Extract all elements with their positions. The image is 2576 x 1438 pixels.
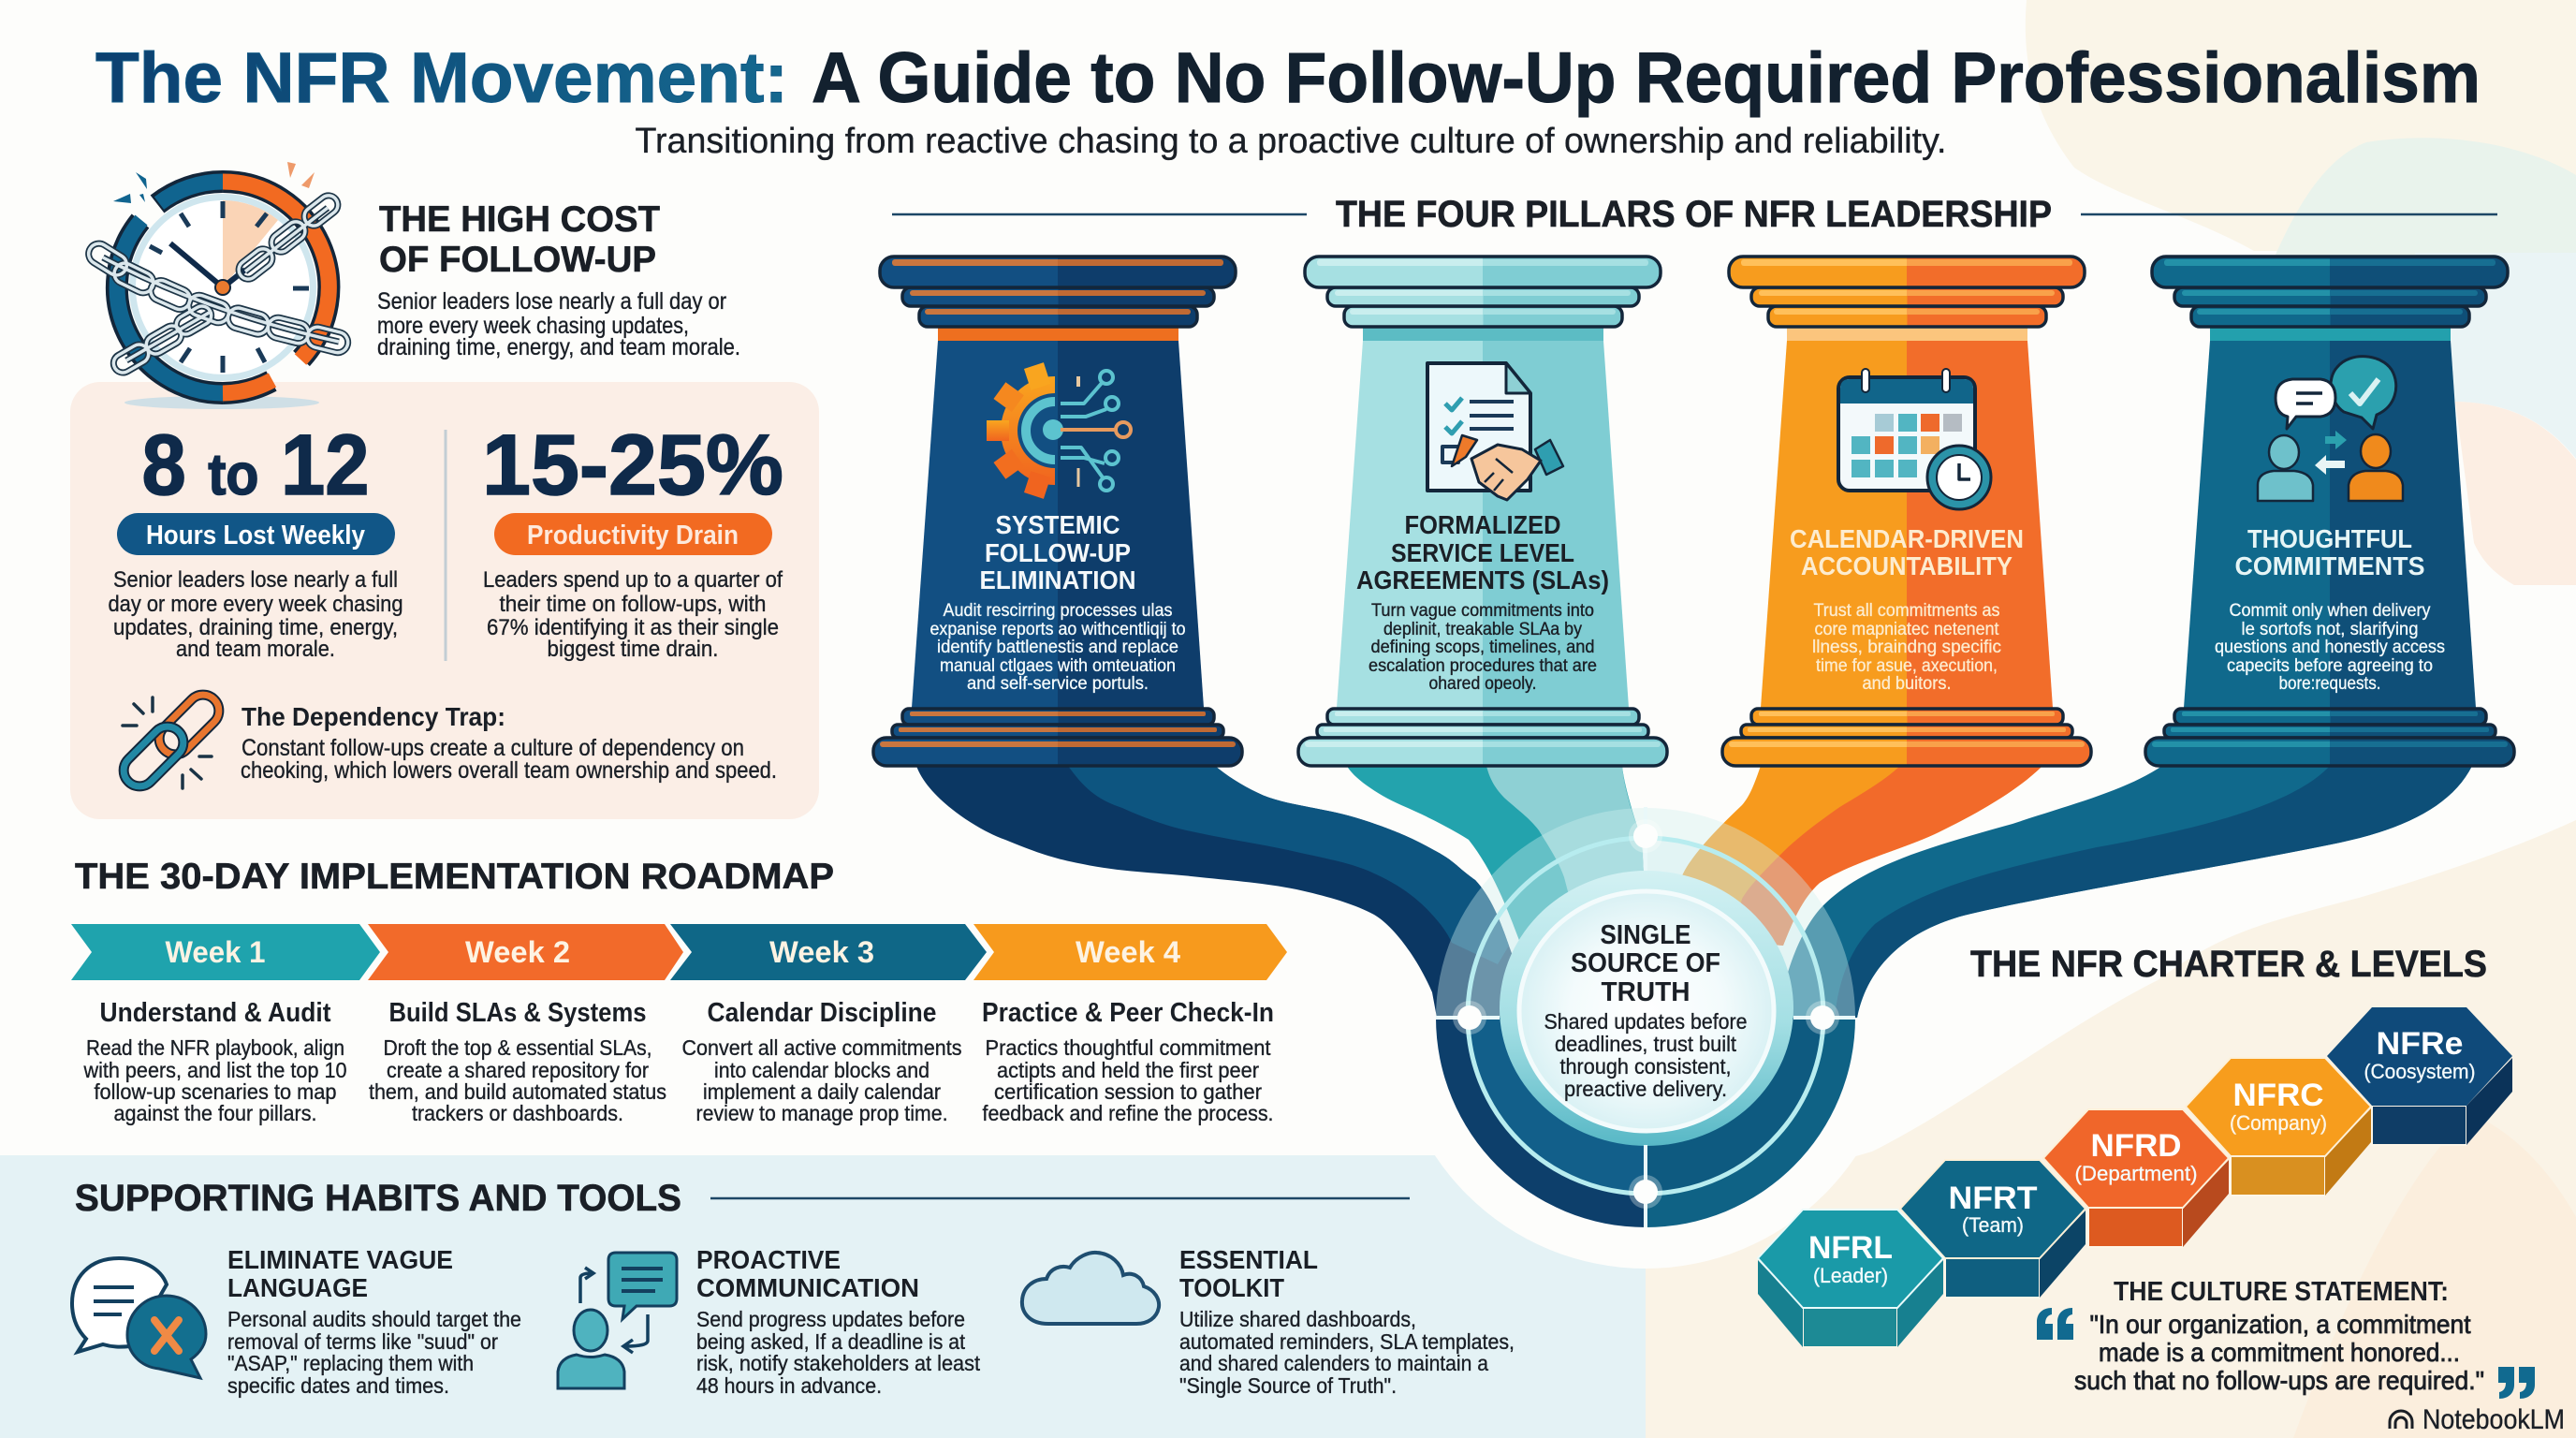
text: proactive communication: Send progress updates before xyxy=(696,1307,965,1331)
pillar 3 text: CALENDAR-DRIVEN xyxy=(1790,524,2024,553)
icon: cloud xyxy=(1022,1253,1159,1324)
heading: high cost of follow-up xyxy=(379,199,660,280)
heading: high cost of follow-up: THE HIGH COST xyxy=(379,199,660,240)
culture statement: "In our organization, a commitment xyxy=(2089,1310,2471,1339)
icon: conversation between two people xyxy=(2258,357,2403,501)
week 3 details: Convert all active commitments xyxy=(681,1035,962,1060)
icon: person with message bubble xyxy=(558,1253,677,1388)
pillar 4 text: THOUGHTFUL xyxy=(2247,524,2412,553)
pillar 1 text: manual ctlgaes with omteuation xyxy=(940,656,1176,676)
week 4 details: actipts and held the first peer xyxy=(997,1058,1259,1082)
week 1 details: follow-up scenaries to map xyxy=(94,1079,337,1104)
week 1 details: against the four pillars. xyxy=(114,1101,316,1125)
pillar 1 text: Audit rescirring processes ulas xyxy=(944,601,1172,621)
text: eliminate vague language: "ASAP," replacing them with xyxy=(227,1351,474,1375)
week 2 details: Droft the top & essential SLAs, xyxy=(384,1035,651,1060)
heading: high cost of follow-up: OF FOLLOW-UP xyxy=(379,240,656,280)
pillar 1 text xyxy=(930,510,1185,694)
pillar 1 text: FOLLOW-UP xyxy=(985,538,1131,567)
icon: broken chain link xyxy=(117,688,226,793)
stat: 8 to 12 hours lost weekly: day or more every week chasing xyxy=(109,592,402,617)
culture statement: made is a commitment honored... xyxy=(2099,1338,2460,1367)
title: A Guide to No Follow-Up Required Professionalism xyxy=(812,38,2481,118)
pillar 2 text xyxy=(1356,510,1609,694)
pillar 4 text: questions and honestly access xyxy=(2215,638,2445,657)
text: essential toolkit: TOOLKIT xyxy=(1179,1273,1284,1302)
pillar 3 text: time for asue, axecution, xyxy=(1816,656,1998,676)
week 2 details: trackers or dashboards. xyxy=(412,1101,623,1125)
title xyxy=(95,38,2481,118)
roadmap chevrons: Week 4 xyxy=(1076,935,1180,969)
text: essential toolkit: and shared calenders to maintain a xyxy=(1179,1351,1488,1375)
pillar 2: formalized service level agreements xyxy=(1298,257,1667,766)
pillar 4 text: COMMITMENTS xyxy=(2235,551,2424,580)
text: the dependency trap: cheoking, which lowers overall team ownership and speed. xyxy=(241,757,777,784)
week 3 details: implement a daily calendar xyxy=(703,1079,941,1104)
level: NFRe ecosystem: NFRe xyxy=(2376,1026,2464,1062)
level: NFRT team: (Team) xyxy=(1962,1213,2024,1237)
level: NFRe ecosystem: (Coosystem) xyxy=(2364,1060,2475,1083)
icon: opening quote mark xyxy=(2037,1308,2073,1340)
stat: 15-25% productivity drain: their time on follow-ups, with xyxy=(500,592,766,617)
pillar 1: systemic follow-up elimination xyxy=(873,257,1242,766)
stat: 8 to 12 hours lost weekly: Hours Lost Weekly xyxy=(146,521,365,550)
hub: single source of truth: preactive delivery. xyxy=(1564,1077,1727,1101)
icon: clock wrapped in chains xyxy=(85,162,350,409)
title: The NFR Movement: xyxy=(95,38,788,118)
level: NFRC company: (Company) xyxy=(2230,1111,2327,1135)
pillar 3: calendar-driven accountability xyxy=(1722,257,2091,766)
icon: closing quote mark xyxy=(2498,1367,2535,1399)
stat: 8 to 12 hours lost weekly: updates, draining time, energy, xyxy=(113,615,398,640)
hub: single source of truth: SINGLE xyxy=(1601,920,1690,950)
week 1 details xyxy=(83,998,346,1125)
culture statement: such that no follow-ups are required." xyxy=(2074,1366,2484,1395)
stat: 8 to 12 hours lost weekly: and team morale. xyxy=(176,637,335,662)
subtitle: Transitioning from reactive chasing to a proactive culture of ownership and reliability. xyxy=(635,122,1947,161)
icon: checklist document and handshake xyxy=(1427,363,1563,500)
roadmap chevrons xyxy=(71,924,1287,980)
pillar 3 text: Trust all commitments as xyxy=(1814,601,1999,621)
stat: 8 to 12 hours lost weekly: Senior leaders lose nearly a full xyxy=(113,567,398,593)
pillar 4 text: Commit only when delivery xyxy=(2230,601,2431,621)
level: NFRD department xyxy=(2043,1109,2229,1247)
level: NFRT team: NFRT xyxy=(1949,1181,2038,1216)
level steps: charter hexagons xyxy=(1758,1007,2512,1347)
week 3 details xyxy=(681,998,962,1125)
level: NFRT team xyxy=(1900,1160,2086,1298)
text: essential toolkit: ESSENTIAL xyxy=(1179,1245,1318,1274)
text: the dependency trap xyxy=(241,702,777,784)
level: NFRD department: (Department) xyxy=(2074,1162,2198,1185)
week 2 details xyxy=(369,998,666,1125)
pillar 4 text: bore:requests. xyxy=(2278,674,2381,694)
hub: single source of truth: TRUTH xyxy=(1601,977,1690,1007)
flow ribbons from pillars into hub xyxy=(916,766,2472,1018)
text: proactive communication xyxy=(696,1245,981,1398)
pillar 2 text: deplinit, treakable SLAa by xyxy=(1383,620,1582,639)
panel: cost statistics background xyxy=(70,382,819,819)
text: eliminate vague language: ELIMINATE VAGUE xyxy=(227,1245,453,1274)
text: eliminate vague language: Personal audits should target the xyxy=(227,1307,521,1331)
stat: 15-25% productivity drain: 15-25% xyxy=(482,418,783,513)
pillar 4 text: capecits before agreeing to xyxy=(2227,656,2433,676)
pillar 1 text: ELIMINATION xyxy=(979,565,1136,594)
stat: 15-25% productivity drain: Leaders spend up to a quarter of xyxy=(483,567,783,593)
pillar 4 text: le sortofs not, slarifying xyxy=(2241,620,2419,639)
week 1 details: with peers, and list the top 10 xyxy=(83,1058,346,1082)
icon: speech bubbles with x xyxy=(72,1258,206,1378)
level: NFRe ecosystem xyxy=(2327,1007,2512,1145)
pillar 2 text: escalation procedures that are xyxy=(1368,656,1597,676)
roadmap chevrons: Week 2 xyxy=(465,935,570,969)
pillar 1 text: SYSTEMIC xyxy=(996,510,1120,539)
text: high cost description xyxy=(377,288,740,360)
week 3 details: review to manage prop time. xyxy=(696,1101,947,1125)
pillar 3 text xyxy=(1790,524,2024,694)
text: essential toolkit xyxy=(1179,1245,1515,1398)
week 2 details: create a shared repository for xyxy=(387,1058,649,1082)
pillar 2 text: AGREEMENTS (SLAs) xyxy=(1356,565,1609,594)
hub: single source of truth: through consistent, xyxy=(1559,1054,1732,1078)
text: essential toolkit: automated reminders, SLA templates, xyxy=(1179,1329,1515,1354)
text: eliminate vague language: specific dates and times. xyxy=(227,1373,449,1398)
stat: 15-25% productivity drain xyxy=(482,418,783,662)
roadmap chevrons: Week 3 xyxy=(769,935,874,969)
pillar 1 text: and self-service portuls. xyxy=(967,674,1149,694)
level: NFRD department: NFRD xyxy=(2091,1128,2181,1164)
text: proactive communication: being asked, If a deadline is at xyxy=(696,1329,966,1354)
pillar 1 text: expanise reports ao withcentliqij to xyxy=(930,620,1185,639)
pillar 4: thoughtful commitments xyxy=(2145,257,2514,766)
pillar 2 text: SERVICE LEVEL xyxy=(1391,538,1574,567)
pillar 3 text: and buitors. xyxy=(1863,674,1951,694)
pillar 2 text: defining scops, timelines, and xyxy=(1370,638,1595,657)
pillar 3 text: ACCOUNTABILITY xyxy=(1801,551,2012,580)
week 2 details: them, and build automated status xyxy=(369,1079,666,1104)
week 4 details xyxy=(982,998,1274,1125)
roadmap chevrons: Week 1 xyxy=(165,935,266,969)
stat: 15-25% productivity drain: Productivity Drain xyxy=(527,521,739,550)
culture statement xyxy=(2037,1277,2535,1399)
text: proactive communication: 48 hours in advance. xyxy=(696,1373,882,1398)
text: essential toolkit: "Single Source of Truth". xyxy=(1179,1373,1397,1398)
level: NFRL leader xyxy=(1758,1210,1943,1347)
week 3 details: into calendar blocks and xyxy=(714,1058,929,1082)
heading: 30-day roadmap: THE 30-DAY IMPLEMENTATION ROADMAP xyxy=(75,857,834,897)
level: NFRL leader: NFRL xyxy=(1808,1230,1893,1266)
text: proactive communication: risk, notify stakeholders at least xyxy=(696,1351,981,1375)
hub: single source of truth: Shared updates before xyxy=(1544,1009,1747,1034)
stat: 15-25% productivity drain: 67% identifying it as their single xyxy=(487,615,779,640)
heading: four pillars: THE FOUR PILLARS OF NFR LEADERSHIP xyxy=(1336,194,2052,235)
culture statement: THE CULTURE STATEMENT: xyxy=(2114,1277,2449,1307)
pillar 4 text xyxy=(2215,524,2445,694)
text: eliminate vague language xyxy=(227,1245,521,1398)
pillar 3 text: core mapniatec netenent xyxy=(1814,620,1999,639)
text: proactive communication: COMMUNICATION xyxy=(696,1273,919,1302)
level: NFRC company xyxy=(2186,1058,2371,1196)
hub: single source of truth: SOURCE OF xyxy=(1571,948,1720,978)
pillar 2 text: Turn vague commitments into xyxy=(1371,601,1594,621)
week 4 details: feedback and refine the process. xyxy=(983,1101,1273,1125)
heading: charter and levels: THE NFR CHARTER & LEVELS xyxy=(1970,944,2487,985)
week 2 details: Build SLAs & Systems xyxy=(389,998,646,1028)
stat: 8 to 12 hours lost weekly: 8 to 12 xyxy=(142,418,369,513)
text: high cost description: more every week chasing updates, xyxy=(377,313,689,339)
text: essential toolkit: Utilize shared dashboards, xyxy=(1179,1307,1416,1331)
text: eliminate vague language: LANGUAGE xyxy=(227,1273,368,1302)
week 4 details: certification session to gather xyxy=(994,1079,1262,1104)
pillar 2 text: FORMALIZED xyxy=(1404,510,1561,539)
text: eliminate vague language: removal of terms like "suud" or xyxy=(227,1329,498,1354)
hub: single source of truth: deadlines, trust built xyxy=(1555,1032,1737,1056)
stat: 15-25% productivity drain: biggest time drain. xyxy=(547,637,719,662)
week 3 details: Calendar Discipline xyxy=(708,998,936,1028)
pillar 1 text: identify battlenestis and replace xyxy=(937,638,1178,657)
icon: gear and circuit xyxy=(987,362,1131,499)
text: high cost description: draining time, energy, and team morale. xyxy=(377,334,740,360)
week 1 details: Read the NFR playbook, align xyxy=(86,1035,344,1060)
level: NFRC company: NFRC xyxy=(2233,1078,2323,1113)
text: the dependency trap: Constant follow-ups create a culture of dependency on xyxy=(242,735,744,761)
text: the dependency trap: The Dependency Trap: xyxy=(242,702,505,731)
stat: 8 to 12 hours lost weekly xyxy=(109,418,402,662)
pillar 2 text: ohared opeoly. xyxy=(1428,674,1537,694)
text: high cost description: Senior leaders lose nearly a full day or xyxy=(377,288,726,315)
week 1 details: Understand & Audit xyxy=(99,998,331,1028)
week 4 details: Practics thoughtful commitment xyxy=(985,1035,1271,1060)
level: NFRL leader: (Leader) xyxy=(1813,1264,1888,1287)
heading: supporting habits and tools: SUPPORTING HABITS AND TOOLS xyxy=(75,1178,681,1219)
hub: single source of truth xyxy=(1436,807,1855,1227)
pillar 3 text: llness, braindng specific xyxy=(1812,638,2001,657)
week 4 details: Practice & Peer Check-In xyxy=(982,998,1274,1028)
icon: calendar with clock xyxy=(1838,369,1991,509)
text: proactive communication: PROACTIVE xyxy=(696,1245,841,1274)
